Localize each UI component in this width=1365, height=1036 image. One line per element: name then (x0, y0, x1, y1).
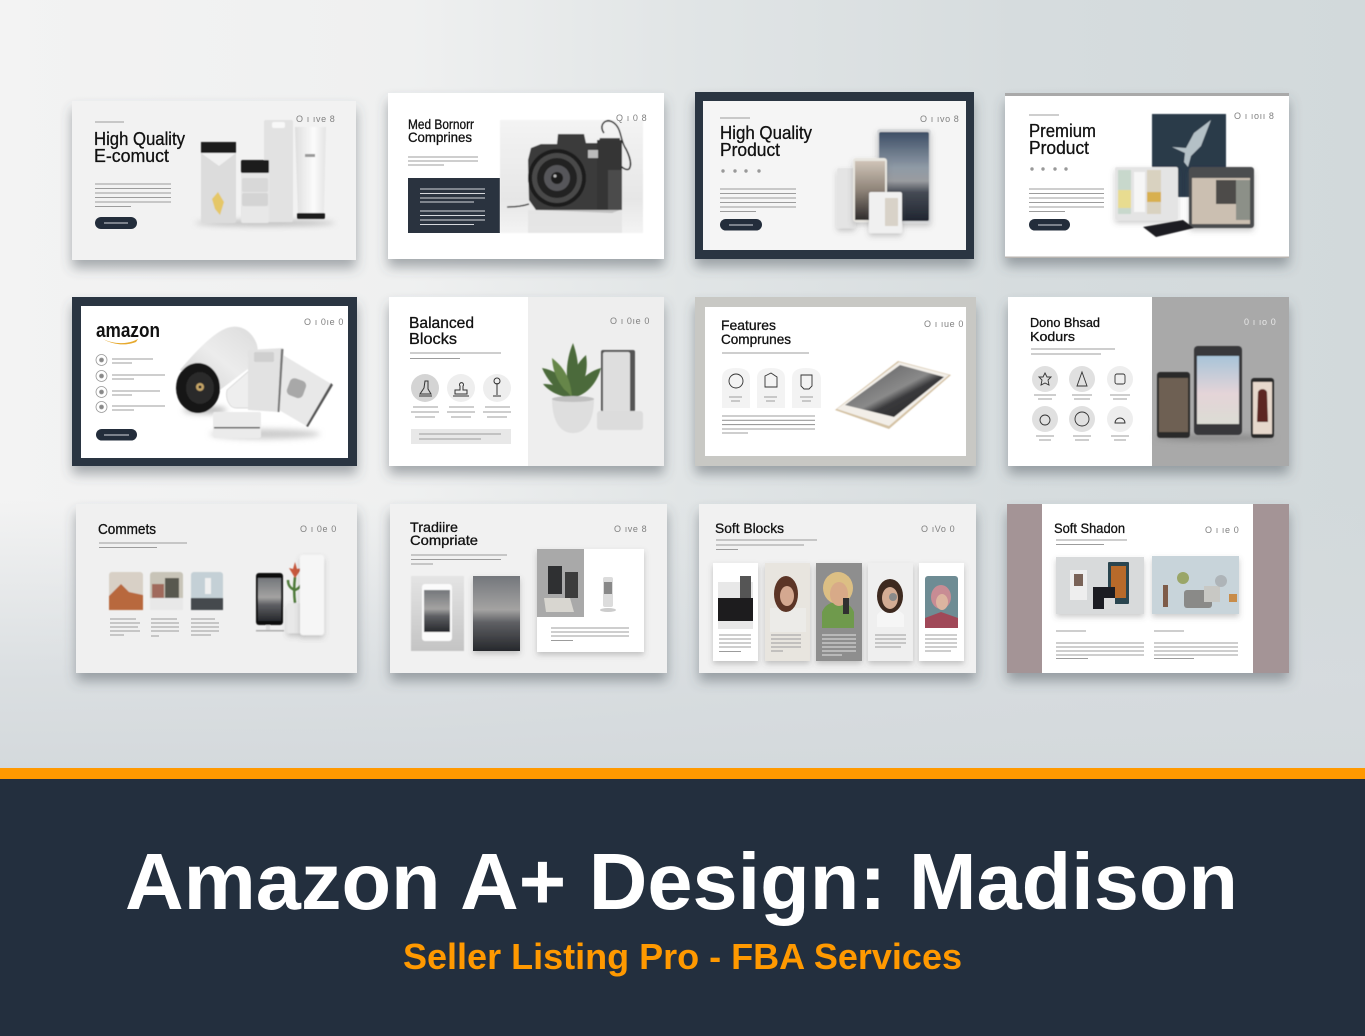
card 9 intro text (99, 543, 187, 548)
card 6 plant and device (542, 343, 643, 433)
card 1 page label: O ı ıve 8 (296, 114, 335, 124)
card 6 icons (411, 374, 511, 402)
panel: card 10 Tradiire Compriate (390, 504, 667, 673)
card 2 dark text block (408, 178, 500, 233)
card 6 icon captions (411, 407, 511, 417)
card 6 title: Balanced (409, 315, 474, 332)
card 10 title (410, 519, 478, 548)
card 3 devices (837, 129, 931, 233)
card 12 photo right (1152, 556, 1239, 614)
card 2 title: Med Bornorr (408, 117, 474, 132)
card 11 strip 1 black machine (713, 563, 758, 661)
card 2 title (408, 117, 474, 145)
card 6 intro text (410, 353, 501, 358)
panel: card 1 High Quality E-comuct (72, 101, 356, 260)
panel: card 3 High Quality Product (695, 92, 974, 259)
card 11 strip 5 portrait (919, 563, 964, 661)
card 1 title: E-comuct (94, 146, 169, 166)
card 3 body text (720, 118, 796, 212)
card 4 dots (1030, 167, 1068, 171)
card 12 title: Soft Shadon (1054, 520, 1125, 536)
card 1 title: High Quality (94, 129, 185, 149)
card 4 title: Product (1029, 138, 1089, 158)
card 4 title (1029, 121, 1096, 158)
card 3 title (720, 123, 812, 160)
card 5 list text (112, 359, 165, 410)
card 7 title: Comprunes (721, 331, 791, 347)
panel: card 5 amazon (72, 297, 357, 466)
card 3 dots (721, 169, 761, 173)
card 3 page label: O ı ıvo 8 (920, 114, 959, 124)
orange divider (0, 768, 1365, 779)
card 10 title: Compriate (410, 532, 478, 548)
card 10 photo with phone (411, 576, 464, 651)
card 8 icon captions (1034, 395, 1130, 440)
panel: card 6 Balanced Blocks (389, 297, 664, 466)
card 10 white panel (537, 549, 644, 652)
card 11 strip 3 portrait (816, 563, 862, 661)
card 10 mountain photo (473, 576, 520, 651)
card 1 button (95, 217, 137, 229)
card 6 page label: O ı 0ıe 0 (610, 316, 650, 326)
card 3 title: High Quality (720, 123, 812, 143)
card 11 strip 4 portrait (868, 563, 913, 661)
footer banner (0, 779, 1365, 1036)
card 7 title: Features (721, 317, 776, 333)
card 5 white camera product (176, 327, 333, 439)
card 1 product bottles (195, 120, 335, 226)
card 8 phones (1155, 346, 1275, 441)
card 4 page label: O ı ıoıı 8 (1234, 111, 1275, 121)
card 10 page label: O ıve 8 (614, 524, 647, 534)
card 9 page label: O ı 0e 0 (300, 524, 337, 534)
card 2 title: Comprines (408, 130, 472, 145)
card 2 intro text (408, 157, 478, 165)
panel: card 7 Features Comprunes (695, 297, 976, 466)
card 7 page label: O ı ıue 0 (924, 319, 964, 329)
main title: Amazon A+ Design: Madison (125, 837, 1238, 926)
card 8 page label: 0 ı ıo 0 (1244, 317, 1276, 327)
subtitle: Seller Listing Pro - FBA Services (403, 936, 962, 977)
card 8 intro text (1031, 349, 1115, 354)
card 12 right text (1154, 631, 1238, 658)
card 11 page label: O ıVo 0 (921, 524, 955, 534)
card 12 intro text (1056, 540, 1127, 544)
card 10 intro text (411, 555, 507, 564)
card 5 button (96, 429, 137, 440)
card 1 title (94, 129, 185, 166)
card 4 title: Premium (1029, 121, 1096, 141)
card 7 body text (722, 416, 815, 433)
panel: card 12 Soft Shadon (1007, 504, 1289, 673)
card 11 title: Soft Blocks (715, 520, 784, 536)
card 2 page label: Q ı 0 8 (616, 113, 647, 123)
card 8 title: Dono Bhsad (1030, 315, 1100, 330)
card 9 product group (256, 555, 324, 635)
panel: card 11 Soft Blocks (699, 504, 976, 673)
card 3 title: Product (720, 140, 780, 160)
card 5 amazon logo: amazon (96, 320, 160, 342)
card 12 left text (1056, 631, 1144, 658)
card 4 body text (1029, 115, 1104, 212)
card 8 icon grid (1032, 366, 1133, 432)
card 7 icon tiles (722, 368, 821, 408)
card 5 icon list (96, 354, 107, 412)
card 8 title (1030, 315, 1100, 344)
card 1 body text (95, 122, 171, 206)
card 12 page label: O ı ıe 0 (1205, 525, 1239, 535)
card 7 intro text (722, 352, 809, 354)
card 7 phone (835, 361, 951, 429)
card 6 note box (411, 429, 511, 444)
card 4 devices (1115, 114, 1254, 237)
panel: card 4 Premium Product (1005, 93, 1289, 258)
panel: card 8 Dono Bhsad Kodurs (1008, 297, 1289, 466)
card 6 title: Blocks (409, 331, 457, 348)
card 2 camera photo (500, 120, 643, 233)
card 6 title (409, 315, 474, 348)
card 9 thumbnails (109, 572, 223, 610)
card 7 title (721, 317, 791, 347)
card 4 button (1029, 219, 1070, 230)
card 11 intro text (716, 540, 817, 550)
card 9 thumbnail captions (110, 619, 219, 636)
card 11 strip 2 portrait (765, 563, 810, 661)
panel: card 9 Commets (76, 504, 357, 673)
card 10 title: Tradiire (410, 519, 458, 535)
card 9 title: Commets (98, 522, 156, 538)
card 12 photo left (1056, 557, 1144, 614)
card 8 title: Kodurs (1030, 329, 1076, 344)
card 5 page label: O ı 0ıe 0 (304, 317, 344, 327)
panel: card 2 Med Bornorr Comprines (388, 93, 664, 259)
card 3 button (720, 219, 762, 230)
